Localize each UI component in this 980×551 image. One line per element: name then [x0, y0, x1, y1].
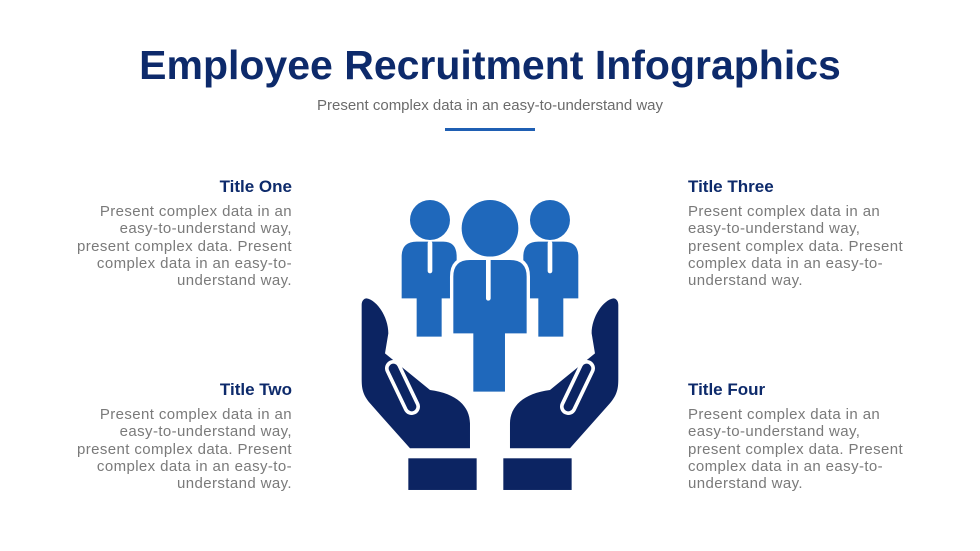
text block: Title Four: Present complex data in an [688, 406, 880, 423]
text block: Title Four: present complex data. Present [688, 441, 903, 458]
text block: Title Three [688, 177, 903, 289]
text block: Title Three: Title Three [688, 177, 774, 196]
underline accent [445, 128, 535, 131]
text block: Title Two: easy-to-understand way, [120, 423, 292, 440]
subtitle: Present complex data in an easy-to-understand way [317, 97, 663, 114]
text block: Title One: Present complex data in an [100, 203, 292, 220]
text block: Title One: present complex data. Present [77, 238, 292, 255]
text block: Title Three: understand way. [688, 272, 803, 289]
text block: Title Four: easy-to-understand way, [688, 423, 860, 440]
text block: Title Four: Title Four [688, 380, 765, 399]
text block: Title Three: present complex data. Present [688, 238, 903, 255]
text block: Title Two: present complex data. Present [77, 441, 292, 458]
text block: Title Three: easy-to-understand way, [688, 220, 860, 237]
text block: Title Two: Title Two [220, 380, 292, 399]
text block: Title Four: understand way. [688, 475, 803, 492]
text block: Title One: Title One [220, 177, 292, 196]
text block: Title One [77, 177, 292, 289]
text block: Title Four: complex data in an easy-to- [688, 458, 883, 475]
text block: Title Two [77, 380, 292, 492]
text block: Title Three: Present complex data in an [688, 203, 880, 220]
text block: Title Two: understand way. [177, 475, 292, 492]
text block: Title One: understand way. [177, 272, 292, 289]
text block: Title One: complex data in an easy-to- [97, 255, 292, 272]
text block: Title One: easy-to-understand way, [120, 220, 292, 237]
title: Employee Recruitment Infographics [139, 42, 841, 88]
text block: Title Four [688, 380, 903, 492]
hands [362, 298, 477, 490]
text block: Title Two: Present complex data in an [100, 406, 292, 423]
text block: Title Three: complex data in an easy-to- [688, 255, 883, 272]
text block: Title Two: complex data in an easy-to- [97, 458, 292, 475]
people [402, 200, 578, 393]
